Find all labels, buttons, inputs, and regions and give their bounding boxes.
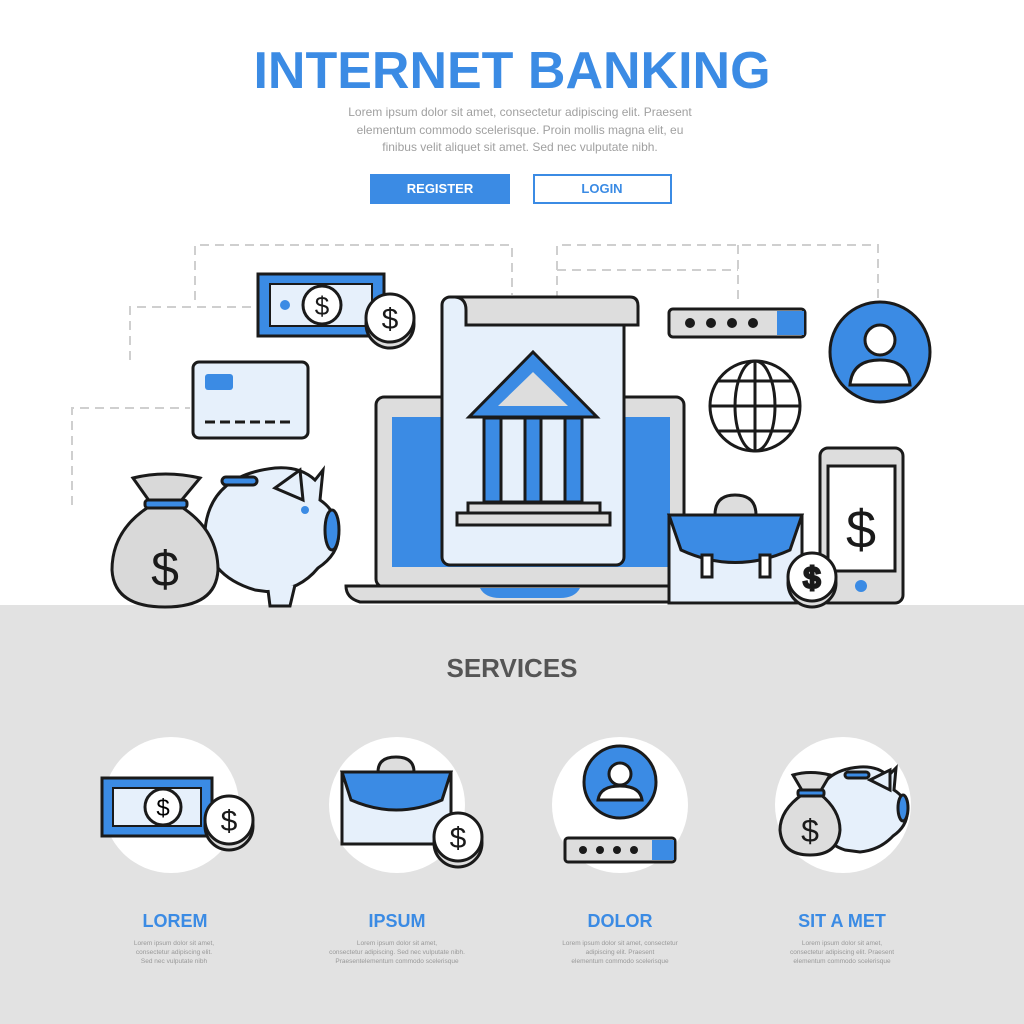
- service: sit a met: [775, 737, 911, 965]
- service: sit a met: SIT A MET: [798, 911, 886, 931]
- service: lorem: Lorem ipsum dolor sit amet,: [134, 940, 214, 947]
- service: dolor: elementum commodo scelerisque: [571, 958, 669, 965]
- register button: [370, 174, 510, 204]
- service: ipsum: IPSUM: [368, 911, 426, 931]
- icon: piggy bank: [205, 468, 339, 606]
- heading: services: SERVICES: [446, 653, 578, 683]
- service: sit a met: Lorem ipsum dolor sit amet,: [802, 940, 882, 947]
- icon: briefcase with coin: [669, 495, 836, 607]
- register button: REGISTER: [407, 181, 474, 196]
- service: lorem: consectetur adipiscing elit.: [136, 949, 212, 956]
- service: ipsum: [329, 737, 482, 965]
- dashed connectors: [72, 245, 878, 505]
- service: lorem: LOREM: [142, 911, 208, 931]
- laptop with bank document: [346, 297, 684, 602]
- icon: money bag: [112, 474, 218, 607]
- icon: money bag: $: [151, 541, 179, 597]
- login button: LOGIN: [581, 181, 623, 196]
- gray services band: [0, 605, 1024, 1024]
- service: lorem: Sed nec vulputate nibh: [141, 958, 207, 965]
- icon: globe: [710, 361, 800, 451]
- login button: [534, 175, 671, 203]
- service: ipsum: Praesentelementum commodo scelerisque: [335, 958, 459, 965]
- service: lorem: [102, 737, 253, 965]
- subtitle text: Lorem ipsum dolor sit amet, consectetur adipiscing elit. Praesent: [348, 105, 692, 119]
- service: lorem: $: [156, 795, 170, 822]
- icon: credit card: [193, 362, 308, 438]
- subtitle text: [348, 105, 692, 154]
- service: sit a met: elementum commodo scelerisque: [793, 958, 891, 965]
- service: dolor: Lorem ipsum dolor sit amet, consectetur: [562, 940, 679, 947]
- subtitle text: elementum commodo scelerisque. Proin mollis magna elit, eu: [357, 123, 683, 137]
- subtitle text: finibus velit aliquet sit amet. Sed nec vulputate nibh.: [382, 140, 658, 154]
- service: sit a met: consectetur adipiscing elit. Praesent: [790, 949, 894, 956]
- service: ipsum: Lorem ipsum dolor sit amet,: [357, 940, 437, 947]
- bank building: [457, 352, 610, 525]
- icon: cash bill with coin: $: [315, 291, 330, 321]
- service: dolor: adipiscing elit. Praesent: [586, 949, 655, 956]
- service: dolor: [552, 737, 688, 965]
- service: ipsum: consectetur adipiscing. Sed nec vulputate nibh.: [329, 949, 465, 956]
- icon: phone: [820, 448, 903, 603]
- icon: cash bill with coin: [258, 274, 414, 348]
- icon: phone: $: [846, 500, 876, 560]
- icon: password bar: [669, 309, 805, 337]
- service: sit a met: $: [801, 813, 819, 849]
- document: [442, 297, 624, 565]
- icon: user avatar: [830, 302, 930, 402]
- service: dolor: DOLOR: [588, 911, 652, 931]
- title: INTERNET BANKING: [253, 42, 771, 100]
